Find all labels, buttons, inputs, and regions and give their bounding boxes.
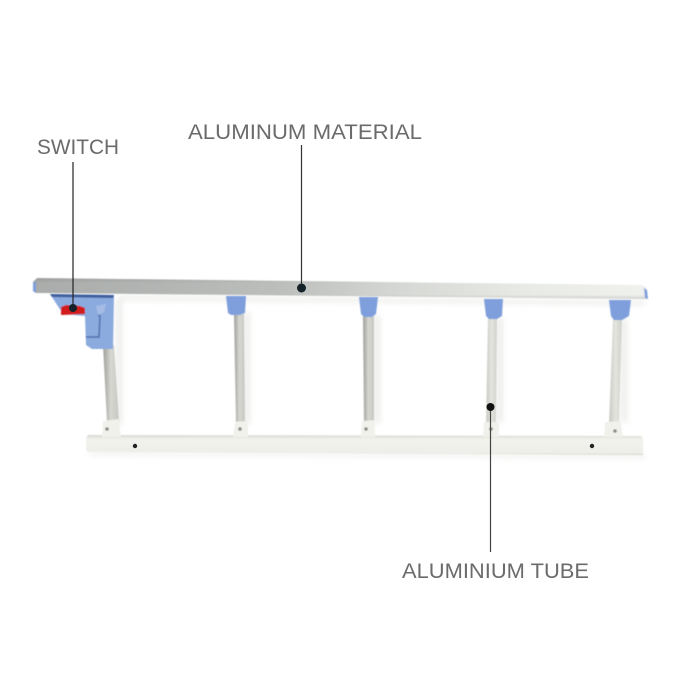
bottom rail	[86, 419, 643, 455]
label: aluminium tube: ALUMINIUM TUBE	[402, 559, 589, 583]
label: switch	[37, 135, 119, 312]
label: switch: SWITCH	[37, 135, 119, 159]
label: aluminum material: ALUMINUM MATERIAL	[188, 120, 422, 144]
blue post caps	[226, 296, 631, 320]
leader line: switch	[69, 162, 77, 312]
blue switch bracket	[50, 294, 114, 349]
top rail	[33, 278, 648, 299]
label: aluminum material	[188, 120, 422, 292]
leader line: aluminum material	[297, 145, 306, 292]
leader line: aluminium tube	[486, 403, 494, 552]
red switch	[61, 305, 85, 315]
shadows of the rail	[90, 296, 645, 458]
aluminium tube posts	[103, 314, 622, 424]
rivets on the bottom rail	[133, 444, 594, 448]
label: aluminium tube	[402, 403, 589, 583]
post bases	[102, 419, 623, 437]
